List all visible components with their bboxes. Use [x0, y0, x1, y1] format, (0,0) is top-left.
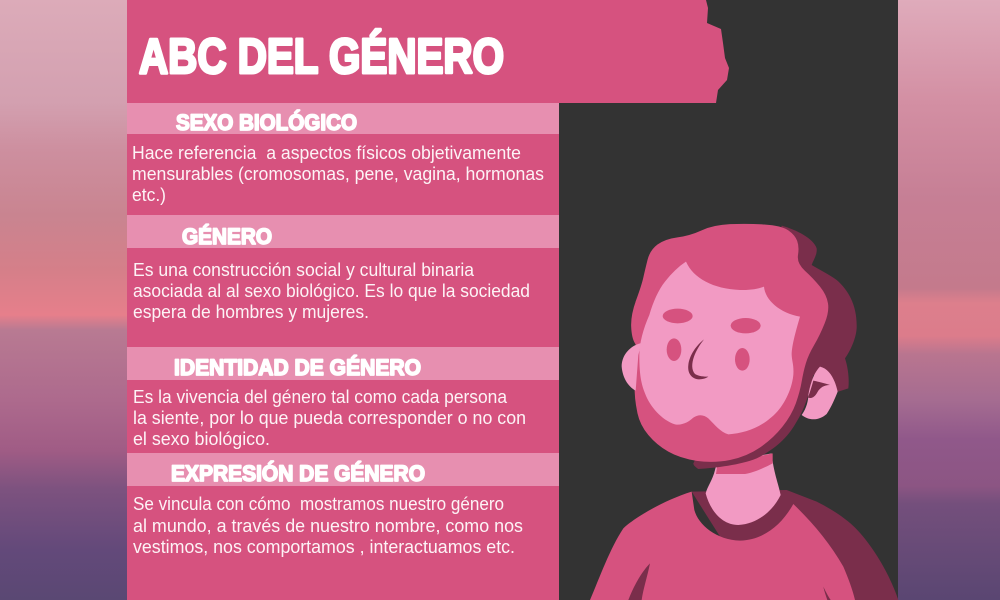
section: género [127, 215, 559, 322]
text block: género: Es una construcción social y cultural binaria [133, 259, 475, 280]
torso [590, 453, 898, 600]
section: identidad de género [127, 347, 559, 449]
hair and beard shadow [693, 226, 857, 469]
text block: expresión de género: al mundo, a través de nuestro nombre, como nos [133, 515, 523, 536]
inner ear [808, 381, 830, 398]
text block: identidad de género: el sexo biológico. [133, 428, 270, 449]
right eye [731, 318, 761, 333]
sleeve fold right [823, 587, 831, 600]
neck shadow [716, 453, 773, 474]
text block: expresión de género: Se vincula con cómo mostramos nuestro género [133, 493, 504, 514]
text block: identidad de género: la siente, por lo que pueda corresponder o no con [133, 407, 526, 428]
face [639, 262, 800, 434]
section: sexo biológico [127, 103, 559, 205]
pink text column [127, 100, 559, 600]
left ear [622, 343, 641, 391]
character illustration [590, 224, 898, 600]
section: expresión de género [127, 453, 559, 557]
heading: género: GÉNERO [182, 224, 272, 249]
nose [688, 339, 708, 379]
text block: género: asociada al al sexo biológico. Es lo que la sociedad [133, 280, 530, 301]
text block: identidad de género: Es la vivencia del género tal como cada persona [133, 386, 508, 407]
text block: sexo biológico [132, 142, 544, 205]
background: left sunset strip [0, 0, 128, 600]
head [622, 224, 857, 469]
title banner with torn edge [127, 0, 729, 103]
heading: expresión de género: EXPRESIÓN DE GÉNERO [171, 461, 425, 486]
text block: sexo biológico: mensurables (cromosomas, pene, vagina, hormonas [132, 163, 544, 184]
text block: sexo biológico: etc.) [132, 184, 166, 205]
sleeve fold left [628, 563, 650, 600]
hair and beard [631, 224, 828, 462]
heading band: género [127, 215, 559, 248]
shirt [590, 492, 855, 600]
right cheek [735, 348, 750, 371]
background: right sunset strip [897, 0, 1000, 600]
text block: sexo biológico: Hace referencia a aspectos físicos objetivamente [132, 142, 521, 163]
heading band: sexo biológico [127, 103, 559, 134]
heading band: identidad de género [127, 347, 559, 380]
heading band: expresión de género [127, 453, 559, 486]
left eye [663, 309, 693, 323]
shirt shadow and collar [692, 490, 898, 600]
heading: identidad de género: IDENTIDAD DE GÉNERO [174, 355, 421, 380]
heading: sexo biológico: SEXO BIOLÓGICO [176, 110, 357, 135]
text block: identidad de género [133, 386, 526, 449]
text block: expresión de género: vestimos, nos comportamos , interactuamos etc. [133, 536, 515, 557]
text block: género [133, 259, 530, 322]
right ear [802, 367, 838, 419]
text block: género: espera de hombres y mujeres. [133, 301, 369, 322]
title: ABC DEL GÉNERO [139, 30, 504, 84]
left cheek [667, 338, 681, 361]
text block: expresión de género [133, 493, 523, 557]
dark panel [127, 0, 898, 600]
neck [706, 453, 781, 525]
